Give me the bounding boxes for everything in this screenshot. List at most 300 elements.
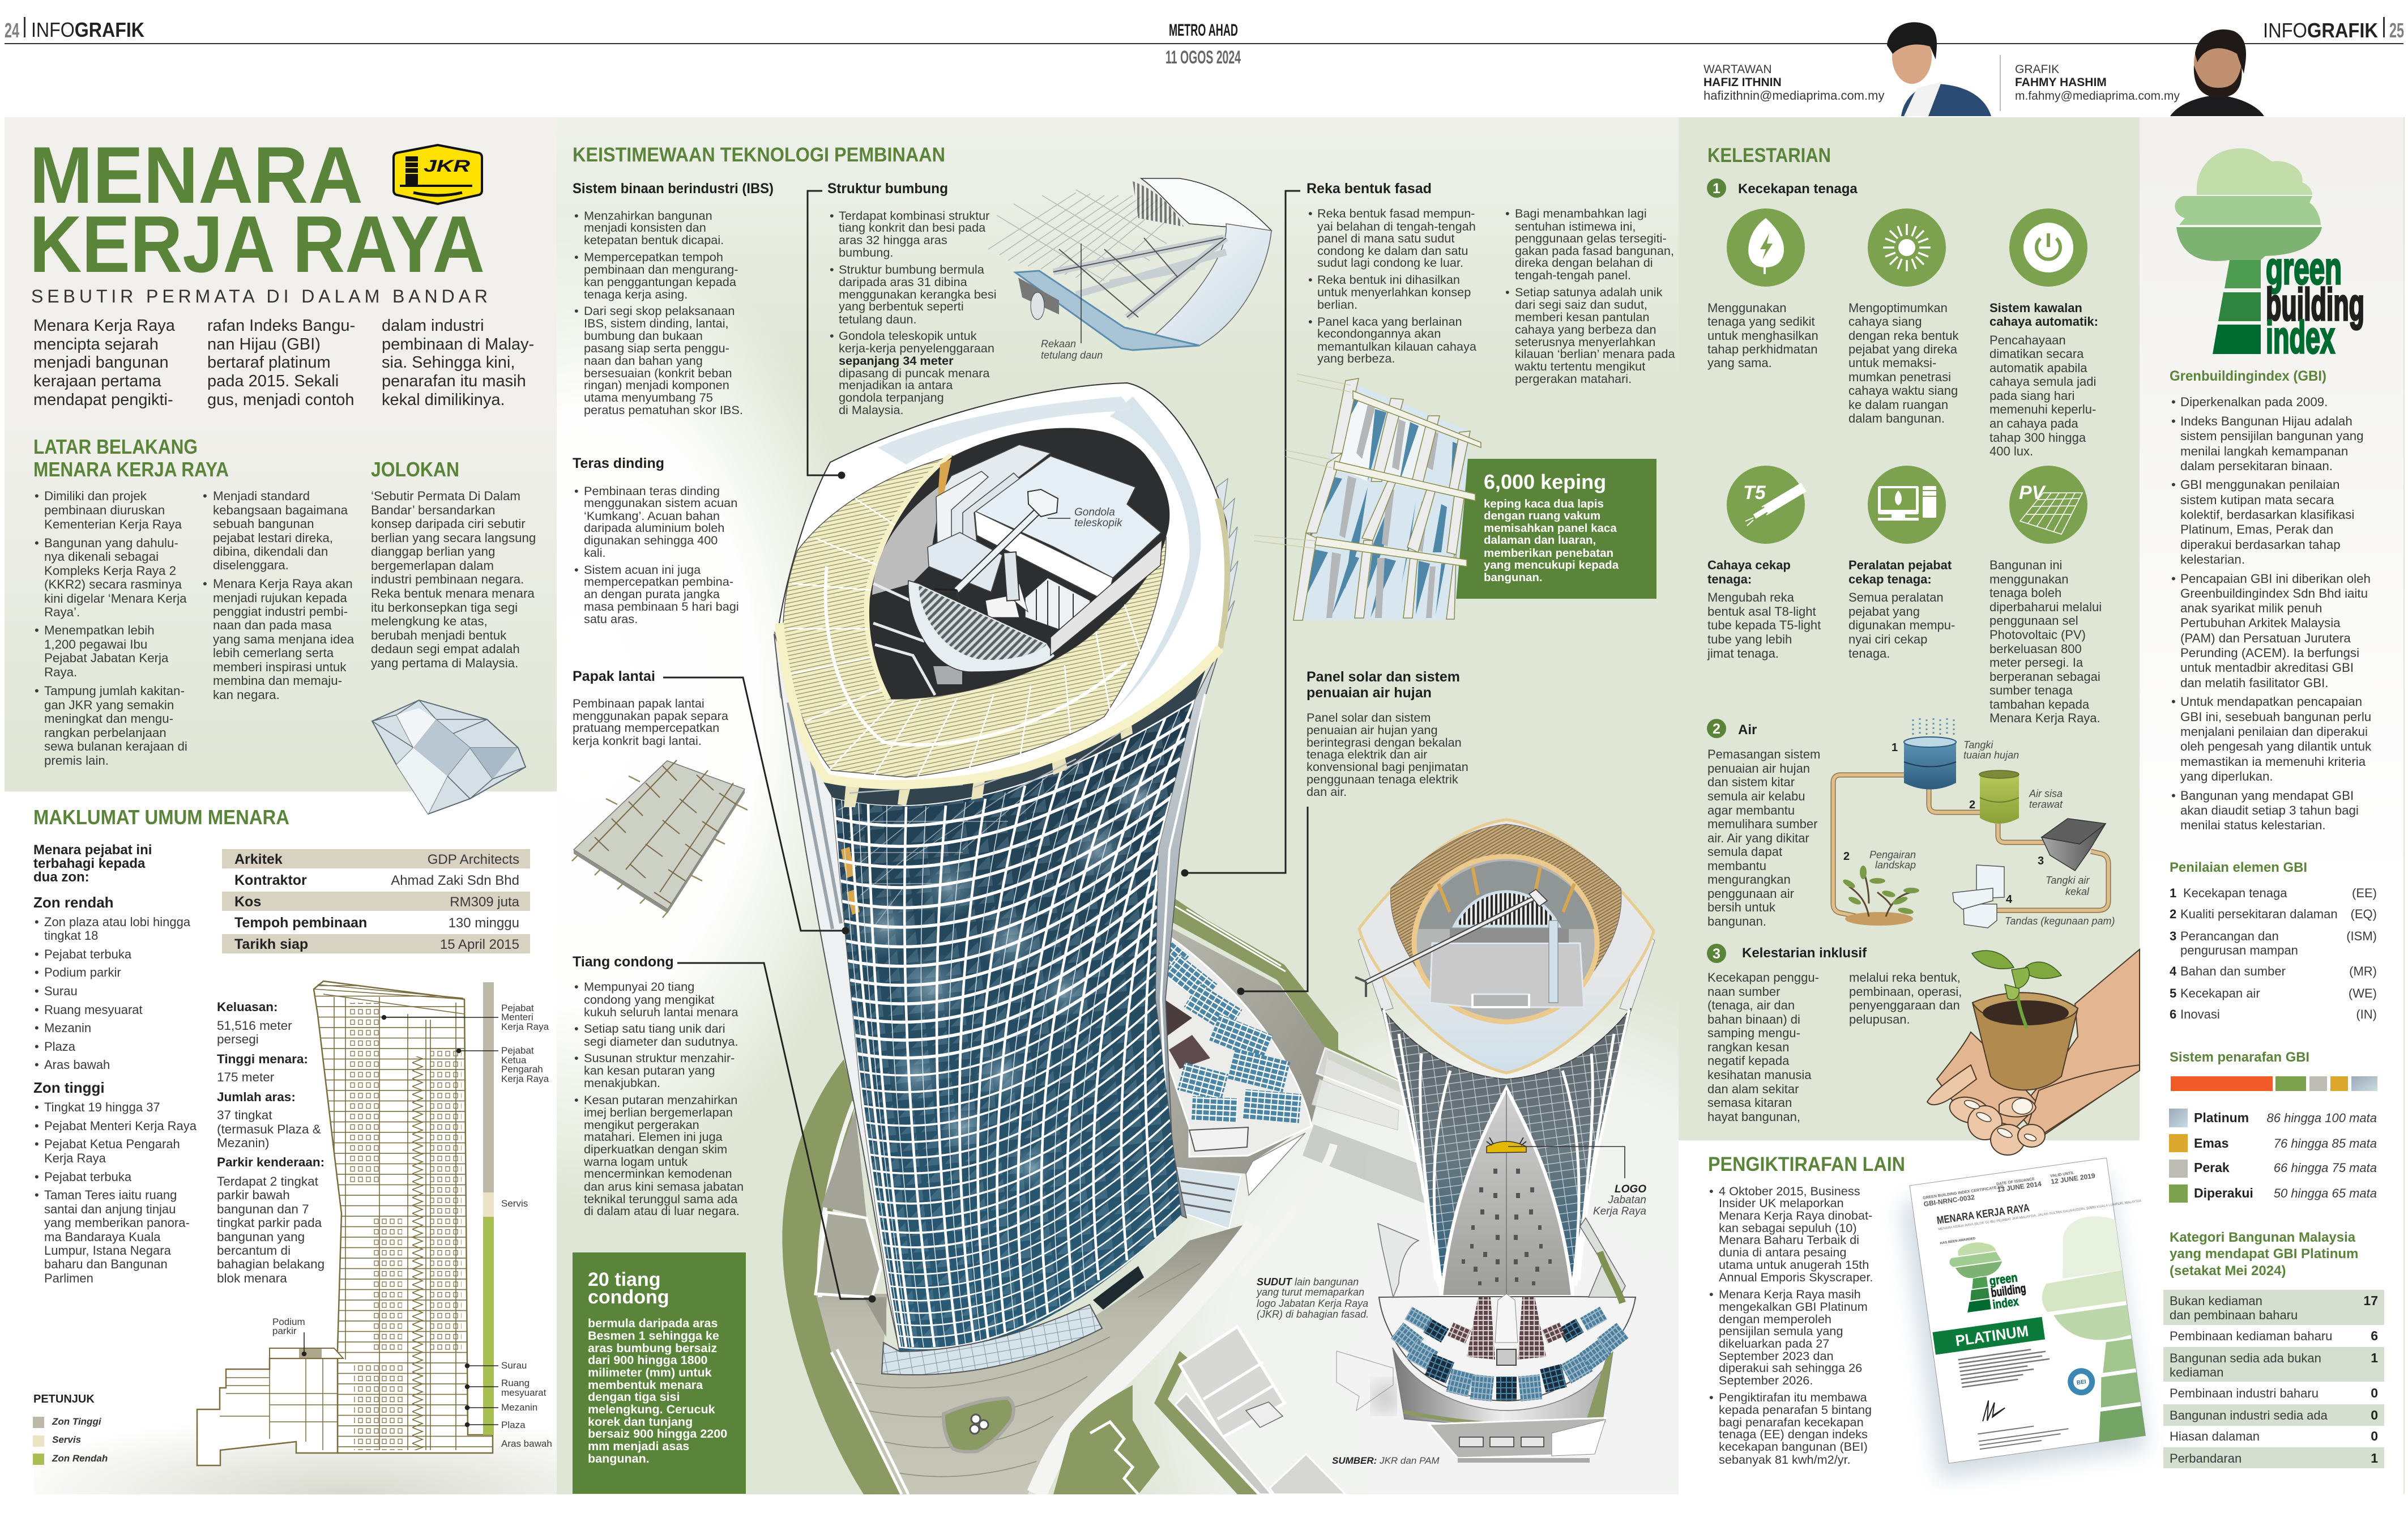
text block: water: bersih untuk (1707, 900, 1776, 914)
text block: raking columns: segi diameter dan sudutnya. (584, 1034, 738, 1049)
text block: roof structure: di Malaysia. (839, 403, 904, 417)
text block: GBI bullets: Pencapaian GBI ini diberikan oleh (2180, 572, 2371, 586)
text block: IBS: pembinaan dan mengurang- (584, 262, 738, 276)
source: SUMBER: JKR dan PAM (1332, 1455, 1440, 1466)
list: GBI assessment elements: Penilaian elemen GBI (2170, 860, 2307, 875)
label: telescopic gondola: teleskopik (1074, 517, 1123, 529)
illustration: ground, plaza and podium (782, 894, 1433, 1494)
text block: other recognition: bagi penarafan kecekapan (1719, 1415, 1864, 1429)
portrait: graphic artist (2170, 29, 2264, 116)
text block: IBS: • (574, 208, 579, 223)
subheading: energy efficiency: Kecekapan tenaga (1738, 181, 1858, 197)
text block: roof structure: menggunakan kerangka besi (839, 287, 997, 301)
gondola arm (1365, 897, 1537, 983)
text block: introduction: bertaraf platinum (207, 353, 331, 372)
text block: water: air. Air yang dikitar (1707, 831, 1809, 845)
labels: cross section: Surau (501, 1360, 527, 1371)
text block: tower stats: parkir bawah (217, 1188, 290, 1202)
diagram: water recycling (1833, 718, 2115, 928)
chart: GBI rating system: 66 hingga 75 mata (2274, 1161, 2377, 1175)
text block: zones: tingkat 18 (44, 928, 98, 943)
text block: zones: Taman Teres iaitu ruang (44, 1188, 177, 1202)
diagram labels: 4 (2006, 893, 2013, 906)
list: GBI assessment elements: (MR) (2349, 964, 2377, 978)
diagram: water recycling: kekal (2065, 886, 2090, 897)
table: Malaysian building categories: dan pembinaan baharu (2170, 1308, 2298, 1322)
text block: core wall: menggunakan sistem acuan (584, 496, 737, 510)
roof slatted crescent (783, 456, 1166, 777)
callout box: 20 raking columns: aras bumbung bersaiz (588, 1341, 717, 1355)
text block: tower stats: bangunan yang (217, 1230, 305, 1244)
text block: zones: dua zon: (33, 870, 89, 885)
text block: zones: yang memberikan panora- (44, 1216, 190, 1230)
text block: raking columns: • (574, 1093, 579, 1107)
text block: raking columns: Kesan putaran menzahirkan (584, 1093, 737, 1107)
table: Malaysian building categories: Bukan kediaman (2170, 1294, 2262, 1308)
text block: background bullets column 2: memberi inspirasi untuk (213, 660, 347, 674)
heading: nickname: JOLOKAN (371, 458, 459, 481)
text block: facade design: seterusnya menyerlahkan (1515, 335, 1655, 349)
list: GBI assessment elements: 1 (2170, 886, 2176, 900)
glass highlights (851, 771, 1163, 1188)
text block: water: bangunan. (1707, 914, 1766, 928)
subheading: energy efficiency (1707, 178, 1858, 198)
table: Malaysian building categories: yang mendapat GBI Platinum (2170, 1246, 2358, 1262)
text block: raking columns (573, 954, 744, 1218)
text block: efficiency columns row 1: cahaya waktu siang (1848, 383, 1958, 398)
text block: zones: • (35, 1188, 39, 1202)
text block: solar panels and rain harvesting: berintegrasi dengan bekalan (1307, 735, 1462, 749)
subheading: inclusive sustainability: 3 (1713, 946, 1720, 962)
text block: roof structure: Gondola teleskopik untuk (839, 329, 977, 343)
icon: sun (1868, 208, 1946, 287)
tower silver strip left (774, 634, 900, 1353)
text block: background bullets column 1: Raya. (44, 665, 77, 679)
second tower roof ring (1359, 820, 1654, 1073)
roof slat ribs (787, 498, 1144, 779)
text block: GBI bullets: Greenbuildingindex Sdn Bhd iaitu (2180, 586, 2368, 600)
text block: zones: • (35, 1058, 39, 1072)
table: project facts: RM309 juta (450, 894, 520, 910)
text block: tower stats: 51,516 meter (217, 1019, 292, 1033)
text block: zones: Mezanin (44, 1021, 91, 1035)
labels: cross section: Ketua (501, 1055, 527, 1066)
labels: cross section: Kerja Raya (501, 1021, 549, 1032)
text block: floor slab: kerja konkrit bagi lantai. (573, 734, 702, 748)
text block: efficiency columns row 2: nyai ciri cekap (1848, 632, 1927, 646)
text block: floor slab: Papak lantai (573, 668, 655, 684)
callout lines: cross section (302, 1015, 498, 1426)
list: GBI assessment elements: (IN) (2356, 1007, 2377, 1021)
text block: facade design (1307, 181, 1675, 386)
text block: other recognition: dengan memperoleh (1719, 1312, 1831, 1326)
text block: efficiency columns row 2: pejabat yang (1848, 604, 1920, 619)
text block: facade design: • (1308, 272, 1313, 287)
text block: other recognition: September 2023 dan (1719, 1349, 1834, 1363)
text block: efficiency columns row 1: 400 lux. (1989, 444, 2033, 458)
labels: cross section: Kerja Raya (501, 1073, 549, 1084)
diagram: water recycling: Tandas (kegunaan pam) (2005, 915, 2115, 927)
text block: zones: Surau (44, 984, 78, 998)
icon: JKR logo (394, 145, 482, 204)
tower base skirt (882, 1305, 1102, 1375)
roof service core blocks (975, 456, 1161, 578)
roof opening floor lines (873, 583, 935, 695)
label: leaf rib: Rekaan (1041, 338, 1076, 350)
icon: JKR logo: JKR (424, 157, 470, 176)
certificate platinum banner: PLATINUM (1954, 1322, 2030, 1349)
text block: facade design: Setiap satunya adalah unik (1515, 285, 1663, 299)
text block: raking columns: Tiang condong (573, 954, 674, 970)
text block: background bullets column 1: nya dikenali sebagai (44, 549, 159, 564)
tower silver strip right (1155, 648, 1220, 1218)
text block: introduction: sia. Sehingga kini, (382, 353, 515, 372)
text block: raking columns: condong yang mengikat (584, 992, 714, 1007)
text block: GBI bullets: sistem kutipan mata secara (2180, 493, 2334, 507)
text block: facade design: kilauan ‘berlian’ menara pada (1515, 347, 1675, 361)
text block: zones: ma Bandaraya Kuala (44, 1230, 161, 1244)
thin mullions (842, 708, 1181, 1347)
chart: GBI rating system: 76 hingga 85 mata (2274, 1136, 2377, 1150)
text block: efficiency columns row 2: tenaga: (1707, 572, 1752, 586)
text block: water: Pemasangan sistem (1707, 747, 1820, 761)
text block: zones: baharu dan Bangunan (44, 1257, 168, 1271)
callout box: 6,000 panels: dengan ruang vakum (1484, 509, 1600, 522)
arrow: floor slab callout (663, 677, 848, 934)
text block: efficiency columns row 1: dengan reka bentuk (1848, 329, 1959, 343)
labels: cross section: Menteri (501, 1012, 533, 1022)
text block: efficiency columns row 2: bentuk asal T8-light (1707, 604, 1816, 619)
text block: roof structure: tetulang daun. (839, 312, 916, 326)
labels: cross section: Podium (272, 1316, 305, 1327)
diagram: water recycling: Tangki air (2046, 875, 2090, 886)
subheading: energy efficiency: 1 (1713, 181, 1720, 197)
heading: other recognition: PENGIKTIRAFAN LAIN (1708, 1153, 1905, 1175)
text block: core wall: digunakan sehingga 400 (584, 533, 718, 547)
text block: facade design: sentuhan istimewa ini, (1515, 219, 1636, 233)
text block: background bullets column 2: yang sama menjana idea (213, 632, 355, 646)
callout box: 20 raking columns: mm menjadi asas (588, 1439, 689, 1453)
callout box: 20 raking columns: bermula daripada aras (588, 1316, 718, 1330)
diagram: water recycling: Pengairan (1869, 849, 1916, 860)
text block: GBI bullets: Platinum, Emas, Perak dan (2180, 522, 2333, 536)
text block: efficiency columns row 1: memenuhi keperlu- (1989, 402, 2096, 416)
text block: background bullets column 1: Pejabat Jabatan Kerja (44, 651, 169, 665)
text block: core wall: masa pembinaan 5 hari bagi (584, 599, 739, 613)
text block: introduction: pembinaan di Malay- (382, 335, 534, 353)
floors (832, 699, 1195, 1058)
text block: efficiency columns row 2: Peralatan pejabat (1848, 558, 1952, 572)
text block: facade design: Reka bentuk fasad (1307, 181, 1432, 197)
fingers (1947, 1065, 2140, 1155)
certificate fine print (1958, 1345, 2070, 1451)
text block: GBI bullets: • (2171, 694, 2176, 709)
illustration: precast floor slab (572, 760, 748, 918)
list: GBI assessment elements: 4 (2170, 964, 2177, 978)
callout box: 20 raking columns (573, 1252, 746, 1494)
text block: facade design: Reka bentuk ini dihasilkan (1317, 272, 1460, 287)
text block: water: semula air kelabu (1707, 789, 1805, 803)
title: KERJA RAYA (29, 199, 485, 289)
chart: GBI rating system: Emas (2194, 1136, 2228, 1150)
opening floor (1430, 943, 1584, 1007)
text block: raking columns: warna logam untuk (583, 1154, 688, 1169)
text block: zones: Ruang mesyuarat (44, 1003, 143, 1017)
text block: roof structure: kerja-kerja penyelenggaraan (839, 341, 994, 355)
second tower podium fan (1379, 1297, 1636, 1401)
chart: GBI rating system: Sistem penarafan GBI (2170, 1050, 2309, 1065)
labels: cross section: Servis (501, 1198, 528, 1209)
list: GBI assessment elements: (WE) (2349, 986, 2377, 1000)
saucer (1141, 178, 1271, 231)
text block: background bullets column 1: Kompleks Kerja Raya 2 (44, 564, 176, 578)
text block: IBS: menjadi konsisten dan (584, 220, 706, 235)
certificate GBI logo: building (1990, 1281, 2027, 1300)
callout box: 20 raking columns: condong (588, 1286, 669, 1308)
text block: facade design: • (1308, 314, 1313, 329)
text block: tower stats: Jumlah aras: (217, 1090, 296, 1104)
legend: zones: Servis (52, 1434, 81, 1445)
text block: zones: Pejabat terbuka (44, 947, 132, 961)
text block: inclusive sustainability: pelupusan. (1849, 1012, 1910, 1026)
text block: water: penuaian air hujan (1707, 761, 1810, 775)
text block: zones: Tingkat 19 hingga 37 (44, 1100, 160, 1114)
table: project facts: Kos (234, 894, 261, 910)
text block: IBS: Mempercepatkan tempoh (584, 250, 723, 264)
text block: other recognition: • (1709, 1287, 1714, 1301)
text block: water: agar membantu (1707, 803, 1795, 817)
text block: roof structure: tiang konkrit dan besi pada (839, 220, 986, 235)
text block: efficiency columns row 2: berkeluasan 800 (1989, 642, 2082, 656)
text block: other recognition: Annual Emporis Skyscraper. (1719, 1270, 1873, 1284)
subheading: inclusive sustainability: Kelestarian inklusif (1742, 945, 1867, 961)
list: GBI assessment elements: 2 (2170, 907, 2176, 921)
caption: other corner: yang turut memaparkan (1256, 1286, 1364, 1298)
text block: zones: Pejabat Ketua Pengarah (44, 1137, 180, 1151)
text block: efficiency columns row 1: untuk memaksi- (1848, 356, 1936, 370)
text block: background bullets column 1: premis lain. (44, 753, 109, 768)
text block: facade design: • (1308, 206, 1313, 220)
text block: solar panels and rain harvesting: dan air. (1307, 785, 1347, 799)
text block: roof structure: daripada aras 31 dibina (839, 275, 968, 289)
diagram: water recycling: Air sisa (2029, 788, 2063, 799)
arrow: roof structure callout (808, 191, 844, 478)
text block: facade design: tengah-tengah panel. (1515, 268, 1631, 282)
text block: raking columns: teknikal terunggul sama ada (584, 1192, 738, 1206)
text block: raking columns: • (574, 1021, 579, 1036)
tower top: dark band with struts under roof (810, 651, 1212, 806)
panel: Green Building Index (2140, 117, 2405, 1494)
diagram labels: 1 (1892, 742, 1898, 754)
label: telescopic gondola: Gondola (1074, 506, 1115, 518)
text block: roof structure: bumbung. (839, 245, 893, 259)
callout box: 6,000 panels: memisahkan panel kaca (1484, 522, 1617, 535)
text block: efficiency columns row 2: diperbaharui melalui (1989, 600, 2102, 614)
list: GBI assessment elements: (ISM) (2346, 929, 2377, 943)
text block: zones: • (35, 1100, 39, 1114)
text block: raking columns: • (574, 1051, 579, 1065)
text block: efficiency columns row 1: cahaya siang (1848, 314, 1922, 329)
text block: nickname: yang pertama di Malaysia. (371, 656, 518, 670)
text block: tower stats: Terdapat 2 tingkat (217, 1174, 319, 1188)
icon: diamond (372, 700, 526, 814)
table: Malaysian building categories: Bangunan sedia ada bukan (2170, 1351, 2321, 1365)
icon: GBI logo: index (2266, 312, 2335, 363)
list: GBI assessment elements: 6 (2170, 1007, 2176, 1021)
text block: other recognition: sebanyak 81 kwh/m2/yr. (1719, 1452, 1851, 1467)
icon: GBI logo: green (2266, 243, 2342, 293)
text block: raking columns: kukuh seluruh lantai menara (584, 1005, 738, 1019)
table: project facts: 15 April 2015 (440, 937, 519, 952)
callout: logo: LOGO (1615, 1183, 1646, 1195)
text block: background bullets column 1: rangkan perbelanjaan (44, 726, 166, 740)
text block: core wall (573, 455, 739, 626)
byline: graphic artist (2015, 29, 2264, 116)
tower glass facade (793, 651, 1223, 1371)
text block: background bullets column 2: naan dan pada masa (213, 618, 332, 632)
heading: background: MENARA KERJA RAYA (33, 458, 229, 481)
icon: computer (1868, 466, 1946, 544)
text block: solar panels and rain harvesting: Panel solar dan sistem (1307, 710, 1431, 725)
roof inner semicircle deck (908, 581, 1055, 672)
certificate BEI seal: BEI (2076, 1379, 2087, 1386)
text block: efficiency columns row 1: tahap perkhidmatan (1707, 342, 1817, 356)
divider between bylines (2000, 55, 2001, 111)
text block: GBI bullets: • (2171, 789, 2176, 803)
text block: facade design: sudut lagi condong ke luar. (1317, 255, 1463, 270)
text block: facade design: condong ke dalam dan satu (1317, 244, 1468, 258)
text block: solar panels and rain harvesting: konvensional bagi penjimatan (1307, 760, 1468, 774)
text block: GBI bullets: Diperkenalkan pada 2009. (2180, 395, 2328, 409)
text block: introduction: kekal dimilikinya. (382, 391, 505, 409)
text block: zones: • (35, 965, 39, 979)
text block: tower stats: (termasuk Plaza & (217, 1122, 321, 1136)
text block: tower stats: Tinggi menara: (217, 1052, 308, 1066)
text block: other recognition: dikeluarkan pada 27 (1719, 1336, 1829, 1350)
label: telescopic gondola (1048, 506, 1123, 529)
text block: efficiency columns row 1: Mengoptimumkan (1848, 301, 1948, 315)
text block: background bullets column 1: • (35, 489, 39, 503)
tank 2 (1980, 774, 2019, 824)
text block: efficiency columns row 1: pada siang hari (1989, 389, 2074, 403)
text block: zones: Zon rendah (33, 894, 114, 911)
text block: introduction: dalam industri (382, 317, 484, 335)
text block: raking columns: dan arus kini semasa jabatan (584, 1179, 744, 1194)
illustration: diamond facade panels (1254, 374, 1481, 620)
text block: nickname: bergemerlapan dalam (371, 559, 494, 573)
text block: background bullets column 1: Raya’. (44, 605, 80, 619)
legend: zones: Zon Tinggi (52, 1416, 102, 1427)
text block: efficiency columns row 1: ke dalam ruangan (1848, 398, 1948, 412)
illustration: GBI platinum certificate: HAS BEEN AWARDED (1940, 1237, 1976, 1245)
text block: solar panels and rain harvesting: tenaga elektrik dan air (1307, 747, 1427, 761)
table: Malaysian building categories: 6 (2371, 1328, 2378, 1343)
arrow: solar panels callout (1238, 807, 1308, 994)
text block: background bullets column 2: • (203, 489, 207, 503)
ground: circular planter (943, 1398, 1014, 1452)
text block: water: mengurangkan (1707, 872, 1791, 887)
text block: facade design: panel di mana satu sudut (1317, 231, 1454, 245)
text block: IBS: bersesuaian (konkrit beban (584, 366, 732, 380)
text block: IBS: naan dan bahan yang (584, 353, 703, 368)
text block: background bullets column 1: Dimiliki dan projek (44, 489, 147, 503)
text block: background bullets column 1: Bangunan yang dahulu- (44, 536, 178, 550)
text block: tower stats: persegi (217, 1032, 259, 1046)
truss members (1053, 238, 1226, 317)
tank 1 (1904, 742, 1956, 790)
text block: IBS: utama menyumbang 75 (584, 390, 713, 404)
text block: other recognition: pensijilan semula yang (1719, 1324, 1843, 1338)
caption: other corner: SUDUT lain bangunan (1257, 1276, 1359, 1288)
text block: efficiency columns row 2: Photovoltaic (PV) (1989, 628, 2086, 642)
text block: GBI bullets: • (2171, 414, 2176, 428)
ground: plaza (816, 1102, 1254, 1494)
text block: inclusive sustainability: Kecekapan penggu- (1707, 970, 1819, 985)
callout: logo: Kerja Raya (1593, 1205, 1646, 1217)
text block: facade design: Bagi menambahkan lagi (1515, 206, 1647, 220)
toilet (1953, 865, 2004, 928)
upper floors see-through structure (838, 756, 1087, 929)
text block: background bullets column 2: dibina, dikendali dan (213, 544, 328, 559)
text block: GBI bullets: anak syarikat milik penuh (2180, 601, 2322, 615)
tower side fins right (1216, 479, 1238, 648)
text block: inclusive sustainability: hayat bangunan, (1707, 1110, 1800, 1124)
labels: cross section: mesyuarat (501, 1387, 547, 1398)
text block: background bullets column 2: menjadi rujukan kepada (213, 591, 347, 605)
text block: facade design: yang berbeza. (1317, 351, 1395, 365)
callout box: 6,000 panels: yang mencukupi kepada (1484, 559, 1619, 572)
subheading: water: Air (1738, 722, 1757, 738)
diagram labels: 2 (1843, 850, 1850, 863)
text block: other recognition: kecekapan bangunan (BEI) (1719, 1439, 1868, 1454)
text block: efficiency columns row 2: penggunaan sel (1989, 613, 2078, 628)
text block: efficiency columns row 2: tambahan kepada (1989, 697, 2090, 711)
callout box: 6,000 panels: memberikan penebatan (1484, 547, 1613, 560)
text block: background bullets column 2: kebangsaan bagaimana (213, 503, 348, 517)
text block: tower stats: Mezanin) (217, 1136, 270, 1150)
text block: inclusive sustainability: negatif kepada (1707, 1054, 1790, 1068)
text block: GBI bullets: menjalani penilaian dan diperakui (2180, 725, 2368, 739)
text block: floor slab (573, 668, 729, 748)
text block: other recognition: diperakui sah sehingga 26 (1719, 1361, 1862, 1375)
certificate GBI logo: green (1988, 1270, 2018, 1288)
text block: tower stats: 175 meter (217, 1070, 275, 1084)
table: Malaysian building categories: Hiasan dalaman (2170, 1429, 2260, 1443)
text block: other recognition: tenaga (EE) dengan indeks (1719, 1427, 1868, 1441)
text block: raking columns: kan kesan putaran yang (584, 1063, 715, 1077)
text block: IBS: Dari segi skop pelaksanaan (584, 304, 735, 318)
list: GBI assessment elements: Bahan dan sumber (2180, 964, 2286, 978)
text block: efficiency columns row 1: tahap 300 hingga (1989, 431, 2086, 445)
callout box: 20 raking columns: korek dan tunjang (588, 1415, 693, 1429)
text block: IBS: peratus pematuhan skor IBS. (584, 403, 743, 417)
text block: efficiency columns row 1: dimatikan secara (1989, 347, 2084, 361)
text block: roof structure: sepanjang 34 meter (839, 353, 954, 368)
ground: green landscape band (782, 1059, 912, 1494)
roof gondola (957, 509, 1040, 590)
chart: GBI rating system: 50 hingga 65 mata (2274, 1186, 2377, 1200)
text block: other recognition: Menara Kerja Raya masih (1719, 1287, 1861, 1301)
text block: raking columns: diperkuatkan dengan skim (584, 1142, 727, 1156)
certificate header text: DATE OF ISSUANCE (1996, 1177, 2035, 1187)
diagram: water recycling: tuaian hujan (1963, 749, 2019, 761)
text block: efficiency columns row 2: digunakan mempu- (1848, 618, 1955, 632)
certificate header text: VALID UNTIL (2050, 1171, 2075, 1178)
chart: GBI rating system (2169, 1050, 2377, 1203)
text block: efficiency columns row 2: Semua peralatan (1848, 590, 1944, 604)
illustration: GBI platinum certificate: GBI-NRNC-0032 (1923, 1193, 1975, 1208)
text block: IBS: IBS, sistem dinding, lantai, (584, 316, 729, 330)
